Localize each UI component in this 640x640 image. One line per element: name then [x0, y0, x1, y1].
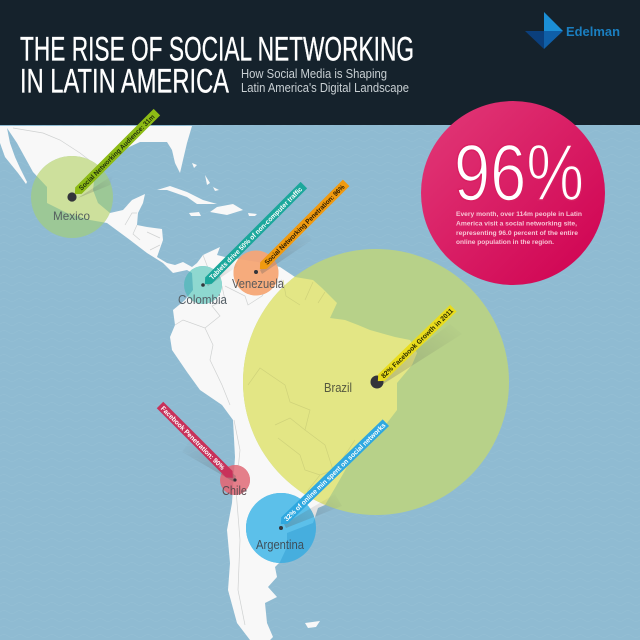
circle: Chile: [220, 465, 250, 495]
circle: Colombia: [184, 266, 222, 304]
banner: Brazil growth: 82% Facebook Growth in 2011: [380, 308, 455, 380]
callout: 96% circle: Every month, over 114m people in Latin: [456, 211, 582, 218]
callout: 96% circle: 96%: [454, 128, 584, 217]
country label: Venezuela: Venezuela: [232, 277, 284, 291]
banner: Argentina time online: 32% of online min spent on social networks: [283, 422, 388, 523]
circle: Argentina: [246, 493, 316, 563]
country label: Brazil: Brazil: [324, 381, 352, 395]
country label: Chile: Chile: [222, 484, 247, 498]
map: Americas land: [0, 126, 417, 640]
callout: 96% circle: [421, 101, 605, 285]
banner: Mexico audience: Social Networking Audience: 31m: [78, 114, 156, 192]
callout: 96% circle: online population in the region.: [456, 239, 554, 246]
circle: Venezuela: [234, 250, 278, 296]
subtitle: How Social Media is Shaping: [241, 67, 387, 81]
callout: 96% circle: representing 96.0 percent of the entire: [456, 230, 578, 237]
logo: Edelman: [525, 12, 620, 49]
banner: Venezuela penetration: Social Networking Penetration: 96%: [264, 184, 346, 267]
title: THE RISE OF SOCIAL NETWORKING: [20, 30, 414, 68]
callout: 96% circle: America visit a social networking site,: [456, 220, 577, 228]
header band: [0, 0, 640, 125]
banner: Chile penetration: Facebook Penetration: 90%: [159, 405, 225, 472]
logo: Edelman: Edelman: [566, 24, 620, 39]
title: IN LATIN AMERICA: [20, 62, 229, 100]
dot: Chile: [233, 478, 237, 482]
dot: Brazil: [370, 376, 384, 388]
title: [20, 30, 414, 100]
circle: Mexico: [31, 156, 113, 238]
dot: Venezuela: [254, 270, 258, 274]
country label: Mexico: Mexico: [53, 209, 90, 223]
banner: Colombia tablets: Tablets drive 50% of non-computer traffic: [209, 186, 304, 282]
circle: Brazil: [243, 249, 509, 515]
dot: Argentina: [279, 526, 283, 530]
country label: Colombia: Colombia: [178, 293, 227, 307]
subtitle: Latin America's Digital Landscape: [241, 81, 409, 95]
dot: Colombia: [201, 283, 205, 287]
dot: Mexico: [67, 192, 77, 202]
country label: Argentina: Argentina: [256, 538, 304, 552]
pin shadows: [78, 175, 462, 528]
subtitle: [241, 67, 409, 95]
